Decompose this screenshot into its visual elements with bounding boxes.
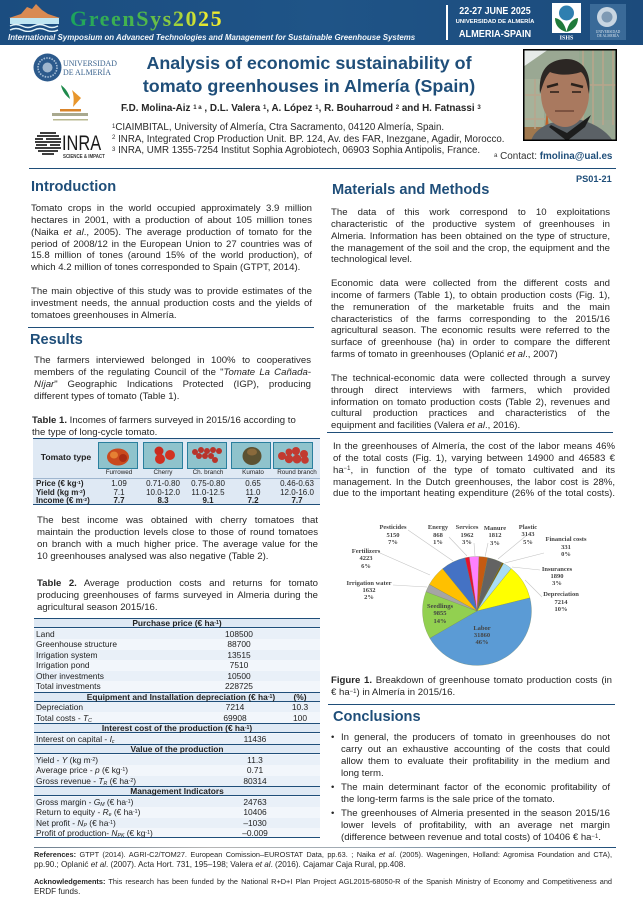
- data labels: 2%: [364, 594, 374, 601]
- logo: Universidad de Almería: [34, 54, 117, 82]
- text: introduction: investment needs, the annual production costs and the yields of: [31, 298, 312, 309]
- date and venue: ALMERIA-SPAIN: [459, 28, 531, 40]
- heading: Conclusions: Conclusions: [333, 709, 421, 725]
- table 2: 10500: [227, 670, 251, 680]
- table 2 caption: Table 2. Average production costs and returns for tomato: [37, 578, 318, 589]
- text: •: [331, 732, 334, 743]
- table 2: 228725: [225, 681, 253, 691]
- photo: round branch tomato: [273, 442, 313, 469]
- data labels: Seedlings: [427, 603, 453, 610]
- icon: university seal: [590, 4, 626, 40]
- text: labor cost: management. In the Dutch greenhouses, the labor cost is 28%,: [333, 477, 615, 488]
- tomato type labels: Kumato: [242, 469, 264, 476]
- row: income: 7.7: [113, 496, 125, 505]
- text: introduction: Tomato crops in the world occupied approximately 3.9 million: [31, 203, 312, 214]
- table 2: Other investments: [36, 670, 104, 680]
- data labels: 1632: [362, 587, 376, 594]
- data labels: 3%: [490, 540, 500, 547]
- data labels: Labor: [473, 625, 491, 632]
- table 2: 24763: [243, 796, 267, 806]
- table 2 caption: producing greenhouses of farms surveyed in Almeria during the: [37, 590, 318, 601]
- row: yield: 11.0-12.5: [191, 488, 225, 496]
- text: materials and methods: equipment and facilities (Valera et al., 2016).: [331, 420, 520, 431]
- logo: Institut agronomique: [52, 85, 88, 120]
- bullet: third conclusion: The greenhouses of Almeria presented in the season 2015/16: [341, 808, 610, 819]
- management section: [34, 786, 320, 796]
- data labels: Plastic: [519, 524, 537, 531]
- table 2: 11.3: [247, 754, 263, 764]
- management section: Management Indicators: [130, 786, 224, 796]
- data labels: 1812: [488, 532, 502, 539]
- data labels: Irrigation water: [347, 580, 392, 587]
- table 2: 69908: [223, 712, 247, 722]
- row: yield: 12.0-16.0: [280, 488, 314, 496]
- data labels: 1%: [433, 539, 443, 546]
- logo: Universidad de Almería: DE ALMERÍA: [63, 68, 111, 77]
- table 2: Total investments: [36, 681, 101, 691]
- table 2: 0.71: [247, 765, 263, 775]
- table 1 row header: Tomato type: [41, 452, 91, 462]
- heading: Results: Results: [30, 332, 83, 348]
- data labels: 7%: [388, 539, 398, 546]
- data labels: 46%: [476, 639, 488, 646]
- row: income: 7.2: [247, 496, 259, 505]
- affiliations: 2 INRA, Integrated Crop Production Unit. BP. 124, Av. des FAR, Inezgane, Agadir, Morocco.: [112, 134, 504, 145]
- interest section: Interest cost of the production (€ ha-1): [102, 723, 252, 733]
- text: materials and methods: the management of the soil and the crop, the equipment and the: [331, 243, 610, 254]
- table 2: Yield - Y (kg m-2): [36, 754, 98, 764]
- table 2: Land: [36, 628, 55, 638]
- text: materials and methods: Economic data were collected from the different costs and: [331, 278, 610, 289]
- text: materials and methods: agricultural season. The economic results were referred to the: [331, 325, 610, 336]
- icon: GreenSys mountain and waves logo: [9, 4, 60, 32]
- photo: kumato tomato: [231, 442, 271, 469]
- data labels: [347, 524, 587, 646]
- row: price: Price (€ kg-1): [36, 478, 84, 488]
- data labels: Insurances: [542, 566, 573, 573]
- table 2: Depreciation: [36, 702, 83, 712]
- text: introduction: tomatoes greenhouses in Almería.: [31, 310, 177, 321]
- interest section: [34, 723, 320, 733]
- text: materials and methods: information on tomato production costs (Table 2), revenues and: [331, 396, 610, 408]
- table 1 caption: Table 1. Incomes of farmers surveyed in 2015/16 according to: [32, 415, 296, 426]
- tomato type labels: Round branch: [277, 469, 317, 476]
- icon: university seal: DE ALMERÍA: [597, 33, 619, 38]
- logo: Universidad de Almería: UNIVERSIDAD: [63, 59, 117, 68]
- row: price: 1.09: [111, 478, 127, 488]
- data labels: 3%: [462, 539, 472, 546]
- data labels: Manure: [484, 525, 506, 532]
- table 2: 100: [293, 712, 307, 722]
- acknowledgements: [34, 877, 612, 896]
- references: References: GTPT (2014). AGRI-C2/TOM27. European Comission–EUROSTAT Data, pp.63. ; Naika et al. (2005). Wageningen, Holland: Agromisa Foundation and CTA),: [34, 850, 612, 859]
- row: yield: [36, 488, 314, 496]
- text: •: [331, 782, 334, 793]
- logo: INRA: INRA: [62, 132, 101, 155]
- text: •: [331, 808, 334, 819]
- bullet: first conclusion: In general, the producers of tomato in greenhouses do not: [341, 732, 610, 743]
- authors: F.D. Molina-Aiz 1 a , D.L. Valera 1, A. López 1, R. Bouharroud 2 and H. Fatnassi 3: [121, 103, 481, 114]
- table 2: Greenhouse structure: [36, 639, 117, 649]
- text: materials and methods: characteristic of the productive system of greenhouses in: [331, 219, 610, 230]
- row: price: 0.46-0.63: [280, 478, 314, 488]
- heading: Introduction: Introduction: [31, 179, 116, 195]
- row: yield: 11.0: [246, 488, 260, 496]
- table 2: –1030: [243, 818, 267, 828]
- row: income: 8.3: [157, 496, 169, 505]
- table 2: 10.3: [292, 702, 308, 712]
- data labels: 868: [433, 532, 444, 539]
- data labels: Fertilizers: [352, 548, 381, 555]
- text: materials and methods: [331, 207, 610, 431]
- divider bar: [446, 5, 448, 40]
- tomato type labels: Cherry: [154, 469, 172, 476]
- text: conclusions list: [331, 732, 610, 843]
- table 2 caption: agricultural season 2015/16.: [37, 602, 158, 613]
- depreciation section: (%): [293, 692, 307, 702]
- affiliations: 3 INRA, UMR 1355-7254 Institut Sophia Agrobiotech, 06903 Sophia Antipolis, France.: [112, 145, 480, 156]
- text: materials and methods: The technical-economic data were collected through a survey: [331, 373, 610, 384]
- text: materials and methods: the remuneration of the marketable fruits and the main: [331, 302, 610, 313]
- photo: furrowed tomato: [98, 442, 138, 469]
- bullet: first conclusion: carry out an exhaustive accounting of the costs that could: [341, 744, 610, 755]
- poster code: PS01-21: [576, 174, 612, 184]
- bullet: first conclusion: allow them to evaluate their profitability in the medium and: [341, 756, 610, 767]
- title: Analysis of economic sustainability of: [146, 53, 472, 73]
- references: [34, 850, 612, 869]
- table 2: 7214: [226, 702, 244, 712]
- row: yield: 10.0-12.0: [146, 488, 180, 496]
- table 2: Gross revenue - TR (€ ha-2): [36, 776, 136, 787]
- logo: INRA: [35, 132, 105, 160]
- acknowledgements: ERDF funds.: [34, 887, 80, 896]
- bullet: third conclusion: [331, 808, 610, 843]
- data labels: 10%: [554, 606, 568, 613]
- table 2: Net profit - NP (€ ha-1): [36, 818, 116, 829]
- data labels: Energy: [428, 524, 449, 531]
- table 2: Return to equity - Re (€ ha-1): [36, 807, 140, 818]
- bullet: third conclusion: (difference between revenue and total costs) of 10406 € ha−1.: [341, 832, 601, 843]
- data labels: Depreciation: [543, 591, 579, 598]
- bullet: third conclusion: lower levels of profitability, with an average net margin: [341, 820, 610, 831]
- text: materials and methods: The data of this work correspond to 10 exploitations: [331, 207, 610, 218]
- table 2: 80314: [243, 776, 267, 786]
- data labels: 0%: [561, 551, 571, 558]
- heading: Materials and Methods: Materials and Methods: [332, 182, 489, 198]
- row: price: [33, 478, 320, 488]
- icon: university seal: UNIVERSIDAD: [596, 30, 621, 34]
- text: best income: maintain the production levels close to those of round tomatoes: [37, 527, 318, 538]
- data labels: 14%: [434, 618, 446, 625]
- acknowledgements: Acknowledgements: This research has been funded by the National R+D+I Plan Project AGL2015-68050-R of the Spanish Ministry of Economy and Competitiveness and: [34, 877, 612, 886]
- table 1: [33, 438, 320, 505]
- data labels: 5150: [386, 532, 400, 539]
- affiliations: 1CIAIMBITAL, University of Almería, Ctra Sacramento, 04120 Almería, Spain.: [112, 122, 444, 133]
- symposium subtitle: International Symposium on Advanced Technologies and Management for Sustainable Greenhouse Systems: [8, 33, 415, 42]
- text: labor cost: In the greenhouses of Almería, the cost of the labor means 46%: [333, 441, 615, 452]
- row: price: 0.65: [245, 478, 261, 488]
- value section: [34, 744, 320, 754]
- table 2: Interest on capital - Ic: [36, 734, 114, 745]
- date and venue: [456, 5, 534, 40]
- data labels: 5%: [523, 539, 533, 546]
- table 1 caption: the type of long-cycle tomato.: [32, 427, 157, 438]
- table 2: 11436: [244, 734, 266, 744]
- data labels: 3143: [522, 531, 535, 538]
- figure 1 caption: [331, 675, 612, 698]
- text: introduction: 15.8 million of tones (around 15% of the world production), of: [31, 250, 312, 261]
- data labels: 1962: [460, 532, 474, 539]
- text: materials and methods: technological level.: [331, 254, 412, 265]
- data labels: 6%: [361, 563, 371, 570]
- table 2: Gross margin - GM (€ ha-1): [36, 796, 133, 808]
- contact: a Contact: fmolina@ual.es: [494, 151, 612, 162]
- text: materials and methods: cultural production practices and characteristics of the: [331, 408, 610, 419]
- row: yield: Yield (kg m-2): [36, 488, 85, 496]
- table 2: Profit of production- NPK (€ kg-1): [36, 828, 153, 839]
- date and venue: 22-27 JUNE 2025: [459, 5, 531, 17]
- text: materials and methods: surface of greenhouse (ha) in order to compare the different: [331, 337, 610, 348]
- text: best income: on branch with a much higher price. The average value for the: [37, 539, 318, 550]
- text: results intro: The farmers interviewed belonged in 100% to cooperatives: [34, 355, 311, 366]
- text: best income: 10 greenhouses analysed was also negative (Table 2).: [37, 551, 268, 562]
- text: introduction: [31, 203, 312, 321]
- date and venue: UNIVERSIDAD DE ALMERÍA: [456, 19, 534, 25]
- data labels: Services: [456, 524, 479, 531]
- depreciation section: [34, 692, 320, 702]
- row: price: 0.71-0.80: [146, 478, 180, 488]
- title: [143, 53, 475, 96]
- text: best income: [37, 515, 318, 562]
- table 2 caption: [37, 578, 318, 613]
- text: materials and methods: through direct interviews with farmers, which provided: [331, 385, 610, 396]
- bullet: first conclusion: [331, 732, 610, 779]
- data labels: Financial costs: [546, 536, 587, 543]
- depreciation section: Equipment and Installation depreciation (€ ha-1): [87, 692, 275, 702]
- header banner: [0, 0, 643, 45]
- table 2: 7510: [230, 660, 248, 670]
- text: materials and methods: income of farmers (Table 1), to obtain production costs (Fig. 1),: [331, 290, 610, 301]
- bullet: second conclusion: [331, 782, 610, 805]
- author photo: [523, 49, 617, 141]
- text: introduction: which 4.2 million of tones corresponded to Spain (GTPT, 2014).: [31, 262, 300, 273]
- affiliations: [112, 122, 504, 156]
- pie slices: [422, 556, 531, 665]
- table 1 caption: [32, 415, 296, 438]
- references: pp.90.; Oplanić et al. (2007). Acta Hort. 731, 195–198; Valera et al. (2016). Cajamar Caja Rural, pp.408.: [34, 860, 406, 869]
- title: tomato greenhouses in Almería (Spain): [143, 76, 475, 96]
- photo: cherry tomato: [143, 442, 183, 469]
- purchase price section: [34, 618, 320, 628]
- table 2: Total costs - TC: [36, 712, 92, 724]
- leader lines: [380, 530, 544, 597]
- row: price: 0.75-0.80: [191, 478, 225, 488]
- row: yield: 7.1: [113, 488, 125, 496]
- figure 1 caption: Figure 1. Breakdown of greenhouse tomato production costs (in: [331, 675, 612, 686]
- tomato type labels: Ch. branch: [193, 469, 223, 476]
- data labels: 9855: [434, 610, 447, 617]
- data labels: Pesticides: [379, 524, 407, 531]
- text: results intro: members of the regulating Council of the "Tomate La Cañada-: [34, 367, 311, 378]
- text: labor cost: due to the important heating expenditure (26% of the total costs).: [333, 488, 615, 499]
- row: income: Income (€ m-2): [36, 496, 90, 505]
- table 2: 108500: [225, 628, 253, 638]
- photo: cherry branch tomato: [187, 442, 227, 469]
- text: introduction: period of 2008/12 in the European Union to 27 countries was of: [31, 239, 312, 250]
- logo: INRA: SCIENCE & IMPACT: [63, 154, 105, 160]
- text: labor cost: ha−1, in function of the type of tomato cultivated and its: [333, 465, 615, 476]
- text: materials and methods: characteristics of the farms corresponding to the 2015/16: [331, 314, 610, 325]
- text: introduction: The main objective of this study was to provide estimates of the: [31, 286, 312, 297]
- data labels: 331: [561, 544, 571, 551]
- value section: Value of the production: [130, 744, 224, 754]
- figure 1 caption: € ha−1) in Almería in 2015/16.: [331, 687, 455, 698]
- row: income: 9.1: [202, 496, 214, 505]
- table 2: 10406: [243, 807, 267, 817]
- text: introduction: hectares in 2001, with a production of about 105 million tones: [31, 215, 312, 226]
- table 2: Irrigation pond: [36, 660, 90, 670]
- data labels: 3%: [552, 580, 562, 587]
- text: materials and methods: Almeria. Information has been obtained on the type of structure,: [331, 231, 610, 242]
- text: labor cost: [333, 441, 615, 499]
- event name: GreenSys2025: [70, 6, 223, 31]
- table 2: Irrigation system: [36, 650, 97, 660]
- table 2: Average price - p (€ kg-1): [36, 765, 128, 775]
- purchase price section: Purchase price (€ ha-1): [132, 618, 222, 628]
- table 2: [34, 618, 320, 838]
- text: materials and methods: farms of tomato in greenhouses (Oplanić et al., 2007): [331, 349, 558, 360]
- tomato type labels: [106, 469, 317, 476]
- text: results intro: different types of tomato (Table 1).: [34, 391, 179, 402]
- text: results intro: Níjar" Geographic Indications Protected (IGP), producing: [34, 379, 311, 390]
- text: best income: The best income was obtained with cherry tomatoes that: [37, 515, 318, 526]
- text: introduction: (Naika et al., 2005). The average production of tomato for the: [31, 227, 312, 238]
- pie chart: production cost breakdown: [346, 524, 587, 666]
- icon: ISHS logo: [552, 3, 581, 41]
- table 2: 13515: [227, 650, 251, 660]
- bullet: first conclusion: long term.: [341, 768, 384, 779]
- bullet: second conclusion: The main determinant factor of the economic profitability of: [341, 782, 610, 793]
- data labels: 31860: [474, 632, 490, 639]
- text: labor cost: of the total costs (Fig. 1), varying between 14900 and 46583 €: [333, 453, 615, 464]
- table 2: –0.009: [242, 828, 268, 838]
- data labels: 7214: [554, 599, 568, 606]
- tomato type labels: Furrowed: [106, 469, 132, 476]
- row: income: 7.7: [291, 496, 303, 505]
- data labels: 1890: [550, 573, 564, 580]
- text: results intro: [34, 355, 311, 402]
- row: income: [36, 496, 303, 505]
- data labels: 4223: [360, 555, 373, 562]
- bullet: second conclusion: the long-term farms is the sale price of the tomato.: [341, 794, 555, 805]
- table 2: 88700: [227, 639, 251, 649]
